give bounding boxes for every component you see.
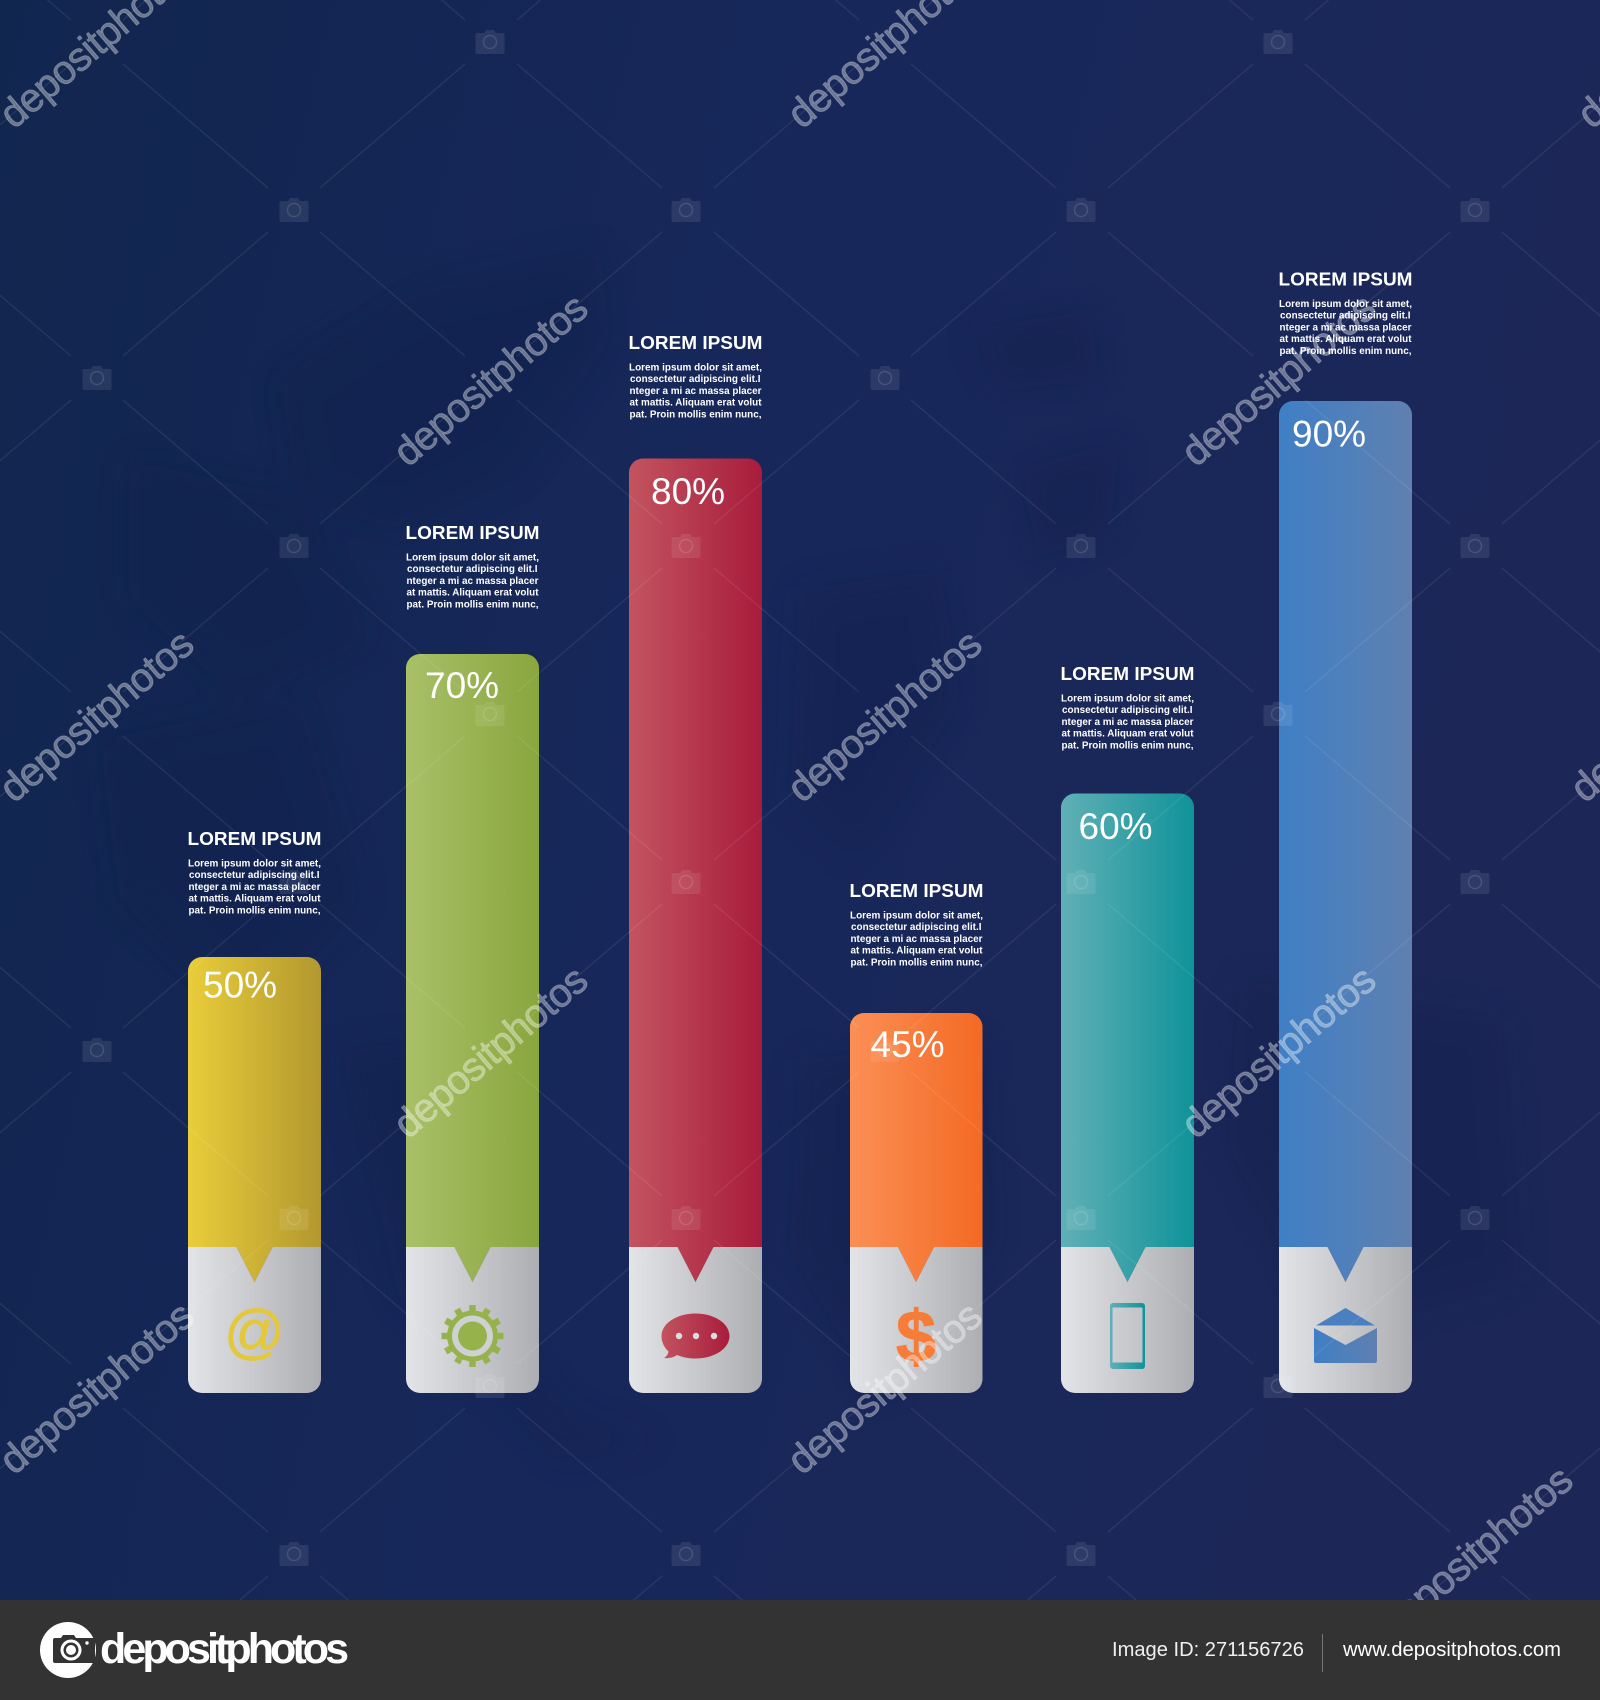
description text: at mattis. Aliquam erat volut: [406, 587, 539, 599]
heading: LOREM IPSUM: [406, 522, 540, 543]
diagonal depositphotos watermarks: depositphotos: [385, 286, 596, 475]
description text: pat. Proin mollis enim nunc,: [406, 598, 539, 610]
description text: at mattis. Aliquam erat volut: [850, 945, 983, 957]
logo wordmark: depositphotos: [100, 1625, 349, 1673]
diagonal depositphotos watermarks: depositphotos: [385, 958, 596, 1147]
description text: nteger a mi ac massa placer: [188, 881, 320, 893]
bar body: [1279, 401, 1412, 1282]
bar column: 45% orange: [850, 880, 984, 1393]
description text: Lorem ipsum dolor sit amet,: [406, 552, 539, 564]
description text: consectetur adipiscing elit.I: [630, 373, 761, 385]
description text: [850, 910, 983, 968]
icon: gear: [442, 1305, 504, 1367]
description text: [1279, 298, 1412, 357]
description text: pat. Proin mollis enim nunc,: [1062, 740, 1194, 752]
description text: nteger a mi ac massa placer: [1062, 716, 1194, 728]
description text: nteger a mi ac massa placer: [630, 385, 762, 397]
image id: Image ID: 271156726: [1112, 1638, 1304, 1661]
percentage label: 50%: [203, 964, 277, 1006]
bar column: 60% teal: [1060, 663, 1194, 1393]
description text: consectetur adipiscing elit.I: [851, 921, 982, 933]
percentage label: 90%: [1292, 414, 1366, 454]
bar column: 50% yellow: [188, 828, 322, 1393]
description text: at mattis. Aliquam erat volut: [630, 397, 762, 409]
icon: camera logo: [40, 1622, 96, 1678]
bar body: [406, 654, 539, 1282]
description text: consectetur adipiscing elit.I: [1280, 310, 1411, 322]
diagonal depositphotos watermarks: depositphotos: [1173, 958, 1384, 1147]
bar body: [850, 1013, 982, 1282]
heading: LOREM IPSUM: [1060, 663, 1194, 684]
description text: nteger a mi ac massa placer: [406, 575, 538, 587]
bar body: [1061, 794, 1194, 1282]
percentage label: 70%: [425, 665, 499, 706]
description text: pat. Proin mollis enim nunc,: [630, 408, 762, 420]
description text: [406, 552, 539, 610]
icon base panel: [850, 1247, 982, 1393]
divider: [1322, 1634, 1323, 1672]
icon base panel: [629, 1247, 762, 1393]
bar column: 70% green: [406, 522, 540, 1393]
icon base panel: [1061, 1247, 1194, 1393]
diagonal depositphotos watermarks: depositphotos: [779, 1294, 990, 1483]
description text: pat. Proin mollis enim nunc,: [188, 904, 321, 916]
icon: at sign: @: [224, 1298, 285, 1365]
icon: smartphone: [1110, 1303, 1145, 1369]
description text: Lorem ipsum dolor sit amet,: [1279, 298, 1412, 310]
description text: Lorem ipsum dolor sit amet,: [188, 858, 321, 870]
icon: dollar sign: $: [896, 1297, 936, 1377]
description text: consectetur adipiscing elit.I: [1062, 704, 1193, 716]
icon: envelope: [1314, 1308, 1377, 1363]
diagonal depositphotos watermarks: depositphotos: [1173, 286, 1384, 475]
description text: pat. Proin mollis enim nunc,: [850, 956, 983, 968]
description text: Lorem ipsum dolor sit amet,: [1061, 692, 1194, 704]
icon base panel: [406, 1247, 539, 1393]
description text: [188, 858, 321, 916]
percentage label: 80%: [651, 471, 725, 512]
heading: LOREM IPSUM: [628, 332, 762, 353]
icon base panel: [188, 1247, 321, 1393]
description text: nteger a mi ac massa placer: [1280, 321, 1412, 333]
description text: consectetur adipiscing elit.I: [407, 563, 538, 575]
diagonal depositphotos watermarks: depositphotos: [779, 622, 990, 811]
description text: Lorem ipsum dolor sit amet,: [629, 362, 762, 374]
description text: [1061, 692, 1194, 752]
description text: at mattis. Aliquam erat volut: [188, 893, 321, 905]
description text: pat. Proin mollis enim nunc,: [1280, 345, 1412, 357]
website url: www.depositphotos.com: [1342, 1638, 1561, 1661]
heading: LOREM IPSUM: [850, 880, 984, 901]
description text: at mattis. Aliquam erat volut: [1062, 728, 1194, 740]
description text: at mattis. Aliquam erat volut: [1280, 333, 1412, 345]
icon base panel: [1279, 1247, 1412, 1393]
percentage label: 60%: [1078, 806, 1153, 847]
footer bar: [0, 1600, 1600, 1700]
icon: speech bubble: [662, 1314, 730, 1358]
percentage label: 45%: [870, 1024, 945, 1065]
diagonal depositphotos watermarks: depositphotos: [1370, 1458, 1581, 1647]
description text: nteger a mi ac massa placer: [850, 933, 982, 945]
description text: consectetur adipiscing elit.I: [189, 869, 320, 881]
world map silhouette: [100, 250, 1520, 1460]
bar body: [188, 957, 321, 1282]
bar column: 80% red: [628, 332, 762, 1393]
heading: LOREM IPSUM: [1278, 268, 1412, 290]
bar column: 90% blue: [1278, 268, 1412, 1393]
heading: LOREM IPSUM: [188, 828, 322, 849]
watermark camera icons: [82, 30, 1490, 1566]
bar body: [629, 458, 762, 1282]
description text: Lorem ipsum dolor sit amet,: [850, 910, 983, 922]
description text: [629, 362, 762, 420]
